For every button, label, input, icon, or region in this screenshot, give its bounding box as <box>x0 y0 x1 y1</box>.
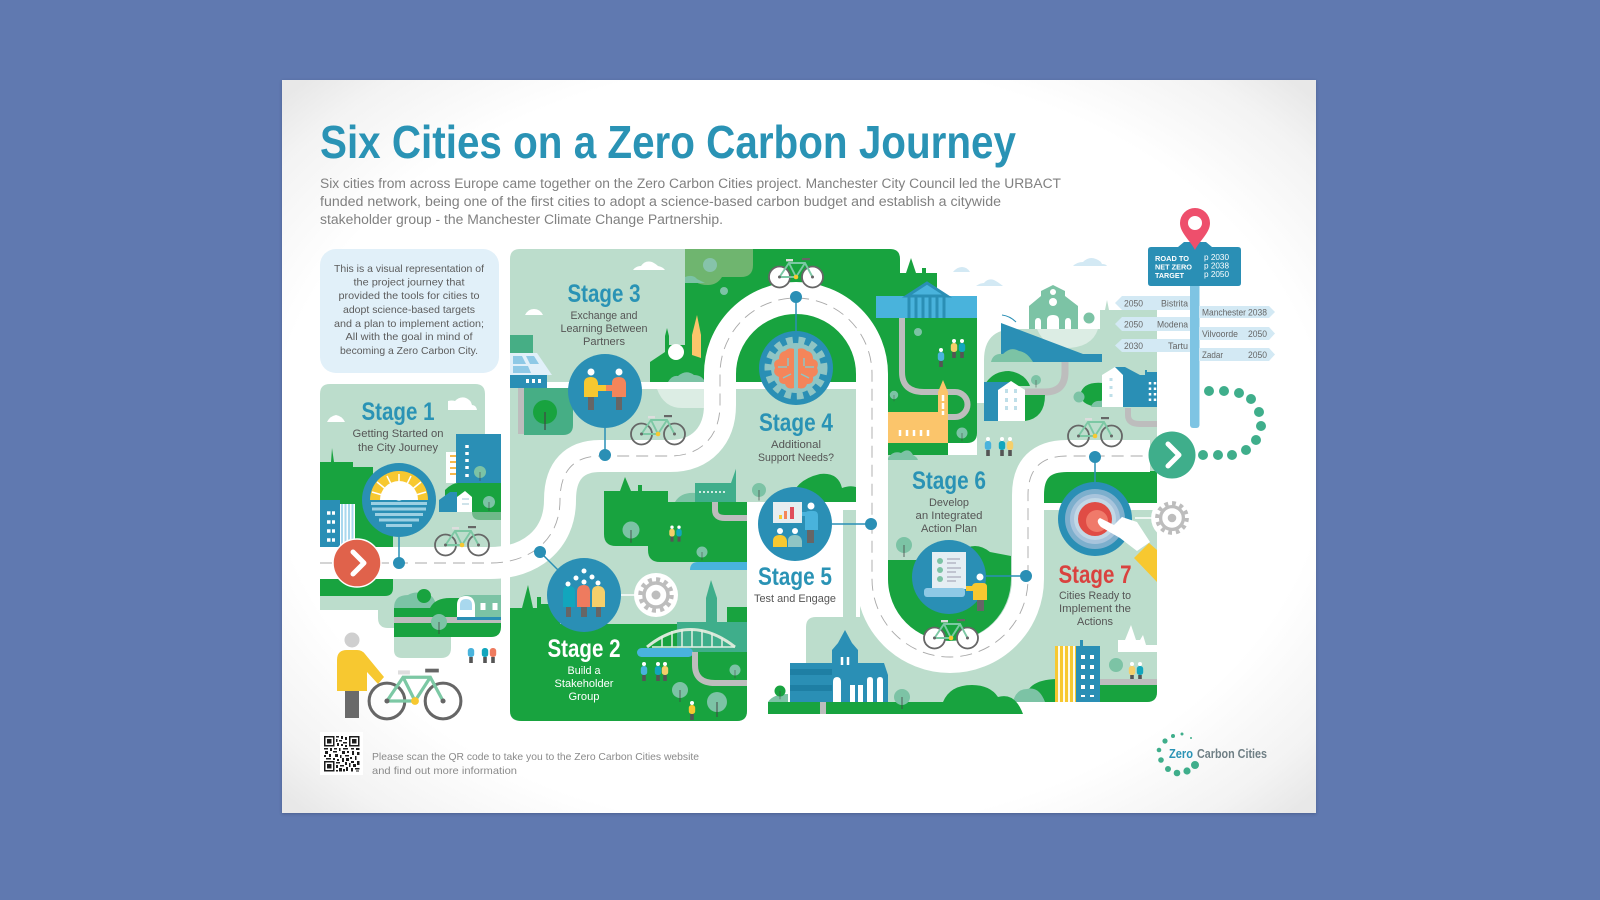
map pin <box>1180 208 1210 250</box>
stage 4 label: Additional <box>771 439 821 451</box>
stage headings <box>352 280 1132 703</box>
info box: This is a visual representation of <box>334 263 484 275</box>
city signs left: 2050 <box>1124 320 1143 330</box>
poster sheet <box>282 80 1316 813</box>
stage 1 label: Getting Started on <box>352 428 444 440</box>
info box <box>320 249 499 373</box>
stage 1 label: Stage 1 <box>362 398 435 426</box>
road <box>320 298 1150 657</box>
QR caption <box>372 751 699 777</box>
signpost: road to net zero <box>1115 208 1275 428</box>
gear: stage 2 <box>621 573 678 617</box>
start arrow <box>333 539 381 587</box>
stage 1 label: the City Journey <box>358 442 439 454</box>
QR caption: Please scan the QR code to take you to the Zero Carbon Cities website <box>372 751 699 763</box>
stage 6 label <box>912 467 986 535</box>
stage 6 garden dome <box>887 546 1011 641</box>
city signs left: Tartu <box>1168 341 1188 351</box>
sign header: TARGET <box>1155 271 1184 280</box>
stage 1 label <box>352 398 444 454</box>
stage 5 icon: presentation <box>758 487 832 561</box>
city signs left: Bistrita <box>1161 298 1188 308</box>
stage 7 hedge <box>1043 471 1157 510</box>
panel: stage 3 scenery <box>510 249 900 547</box>
logo: Zero Carbon Cities: Carbon Cities <box>1197 746 1267 761</box>
stage 7 label: Actions <box>1077 616 1113 628</box>
logo: Zero Carbon Cities: Zero <box>1169 746 1193 761</box>
panel: stage 1 scenery <box>320 384 501 663</box>
stage 7 label: Cities Ready to <box>1059 590 1131 602</box>
sign header <box>1148 242 1241 286</box>
panel: stage 5 backdrop <box>747 502 856 617</box>
stage 2 label <box>548 635 620 703</box>
stage 6 icon: action plan <box>912 540 987 614</box>
stage 4 label <box>758 409 834 464</box>
title: Six Cities on a Zero Carbon Journey <box>320 116 1016 168</box>
city signs left <box>1115 296 1190 352</box>
stage 5 label: Test and Engage <box>754 593 836 605</box>
stage 6 label: an Integrated <box>916 510 982 522</box>
info box: and a plan to implement action; <box>334 318 484 330</box>
panel: stage 6 and 7 scenery <box>806 258 1157 702</box>
stage 2 icon: stakeholder group <box>547 558 621 632</box>
gear: stage 7 <box>1135 497 1193 539</box>
city signs left: Modena <box>1157 320 1188 330</box>
stage 6 label: Stage 6 <box>912 467 986 495</box>
QR caption: and find out more information <box>372 765 517 777</box>
city signs right: Zadar <box>1202 350 1223 360</box>
stage 5 label: Stage 5 <box>758 563 832 591</box>
stage 5 label <box>754 563 836 605</box>
stage 4 label: Stage 4 <box>759 409 833 437</box>
sign header: p 2050 <box>1204 270 1230 279</box>
connector lines and pins <box>394 292 1100 582</box>
person with bicycle <box>337 632 461 719</box>
stage 3 label: Stage 3 <box>568 280 640 308</box>
bottom hedge and town hall <box>768 630 1023 714</box>
logo: Zero Carbon Cities <box>1157 732 1267 776</box>
sign header: NET ZERO <box>1155 262 1192 272</box>
city signs right <box>1199 306 1275 361</box>
city signs left: 2050 <box>1124 298 1143 308</box>
stage 6 label: Action Plan <box>921 523 977 535</box>
dotted trail <box>1198 386 1266 460</box>
city signs right: Vilvoorde <box>1202 329 1238 339</box>
info box: All with the goal in mind of <box>346 331 473 343</box>
stage 4 label: Support Needs? <box>758 452 834 464</box>
panel: stage 4 scenery <box>736 382 856 502</box>
finish arrow <box>1148 432 1196 478</box>
intro text: stakeholder group - the Manchester Climate Change Partnership. <box>320 212 723 227</box>
intro text <box>320 176 1061 227</box>
stage 7 icon: target and hand <box>1058 482 1157 582</box>
info box: provided the tools for cities to <box>338 290 480 302</box>
info box: the project journey that <box>354 276 465 288</box>
QR code <box>320 732 363 775</box>
sign header: p 2038 <box>1204 262 1230 270</box>
stage 7 label: Stage 7 <box>1058 561 1132 589</box>
stage 7 label <box>1058 561 1132 628</box>
stage 6 label: Develop <box>929 497 969 509</box>
intro text: funded network, being one of the first cities to adopt a science-based carbon budget and establish a citywide <box>320 194 1001 209</box>
panel: stage 2 scenery <box>510 389 747 721</box>
city signs left: 2030 <box>1124 341 1143 351</box>
stage 7 label: Implement the <box>1059 603 1131 615</box>
sign header: p 2030 <box>1204 253 1230 262</box>
stage 3 label: Exchange and <box>570 310 638 322</box>
info box: becoming a Zero Carbon City. <box>340 345 478 357</box>
city signs right: Manchester <box>1202 308 1246 318</box>
intro text: Six cities from across Europe came together on the Zero Carbon Cities project. Manchester City Council led the URBACT <box>320 176 1061 191</box>
stage 1 icon: sunrise <box>362 463 436 537</box>
stage 4 icon: brain in gear <box>759 331 833 405</box>
info box: adopt science-based targets <box>343 304 475 316</box>
city signs right: 2050 <box>1248 350 1267 360</box>
stage 3 label: Partners <box>583 336 625 348</box>
stage 3 label: Learning Between <box>560 323 648 335</box>
city signs right: 2038 <box>1248 308 1267 318</box>
stage 2 label: Build a <box>568 665 601 677</box>
stage 2 label: Group <box>568 691 600 703</box>
stage 3 label <box>560 280 648 348</box>
city signs right: 2050 <box>1248 329 1267 339</box>
stage 2 label: Stakeholder <box>554 678 614 690</box>
stage 3 icon: partners handshake <box>568 354 642 428</box>
sign header: ROAD TO <box>1155 254 1189 263</box>
stage 2 label: Stage 2 <box>548 635 620 663</box>
bicycles on the road <box>435 258 1122 648</box>
